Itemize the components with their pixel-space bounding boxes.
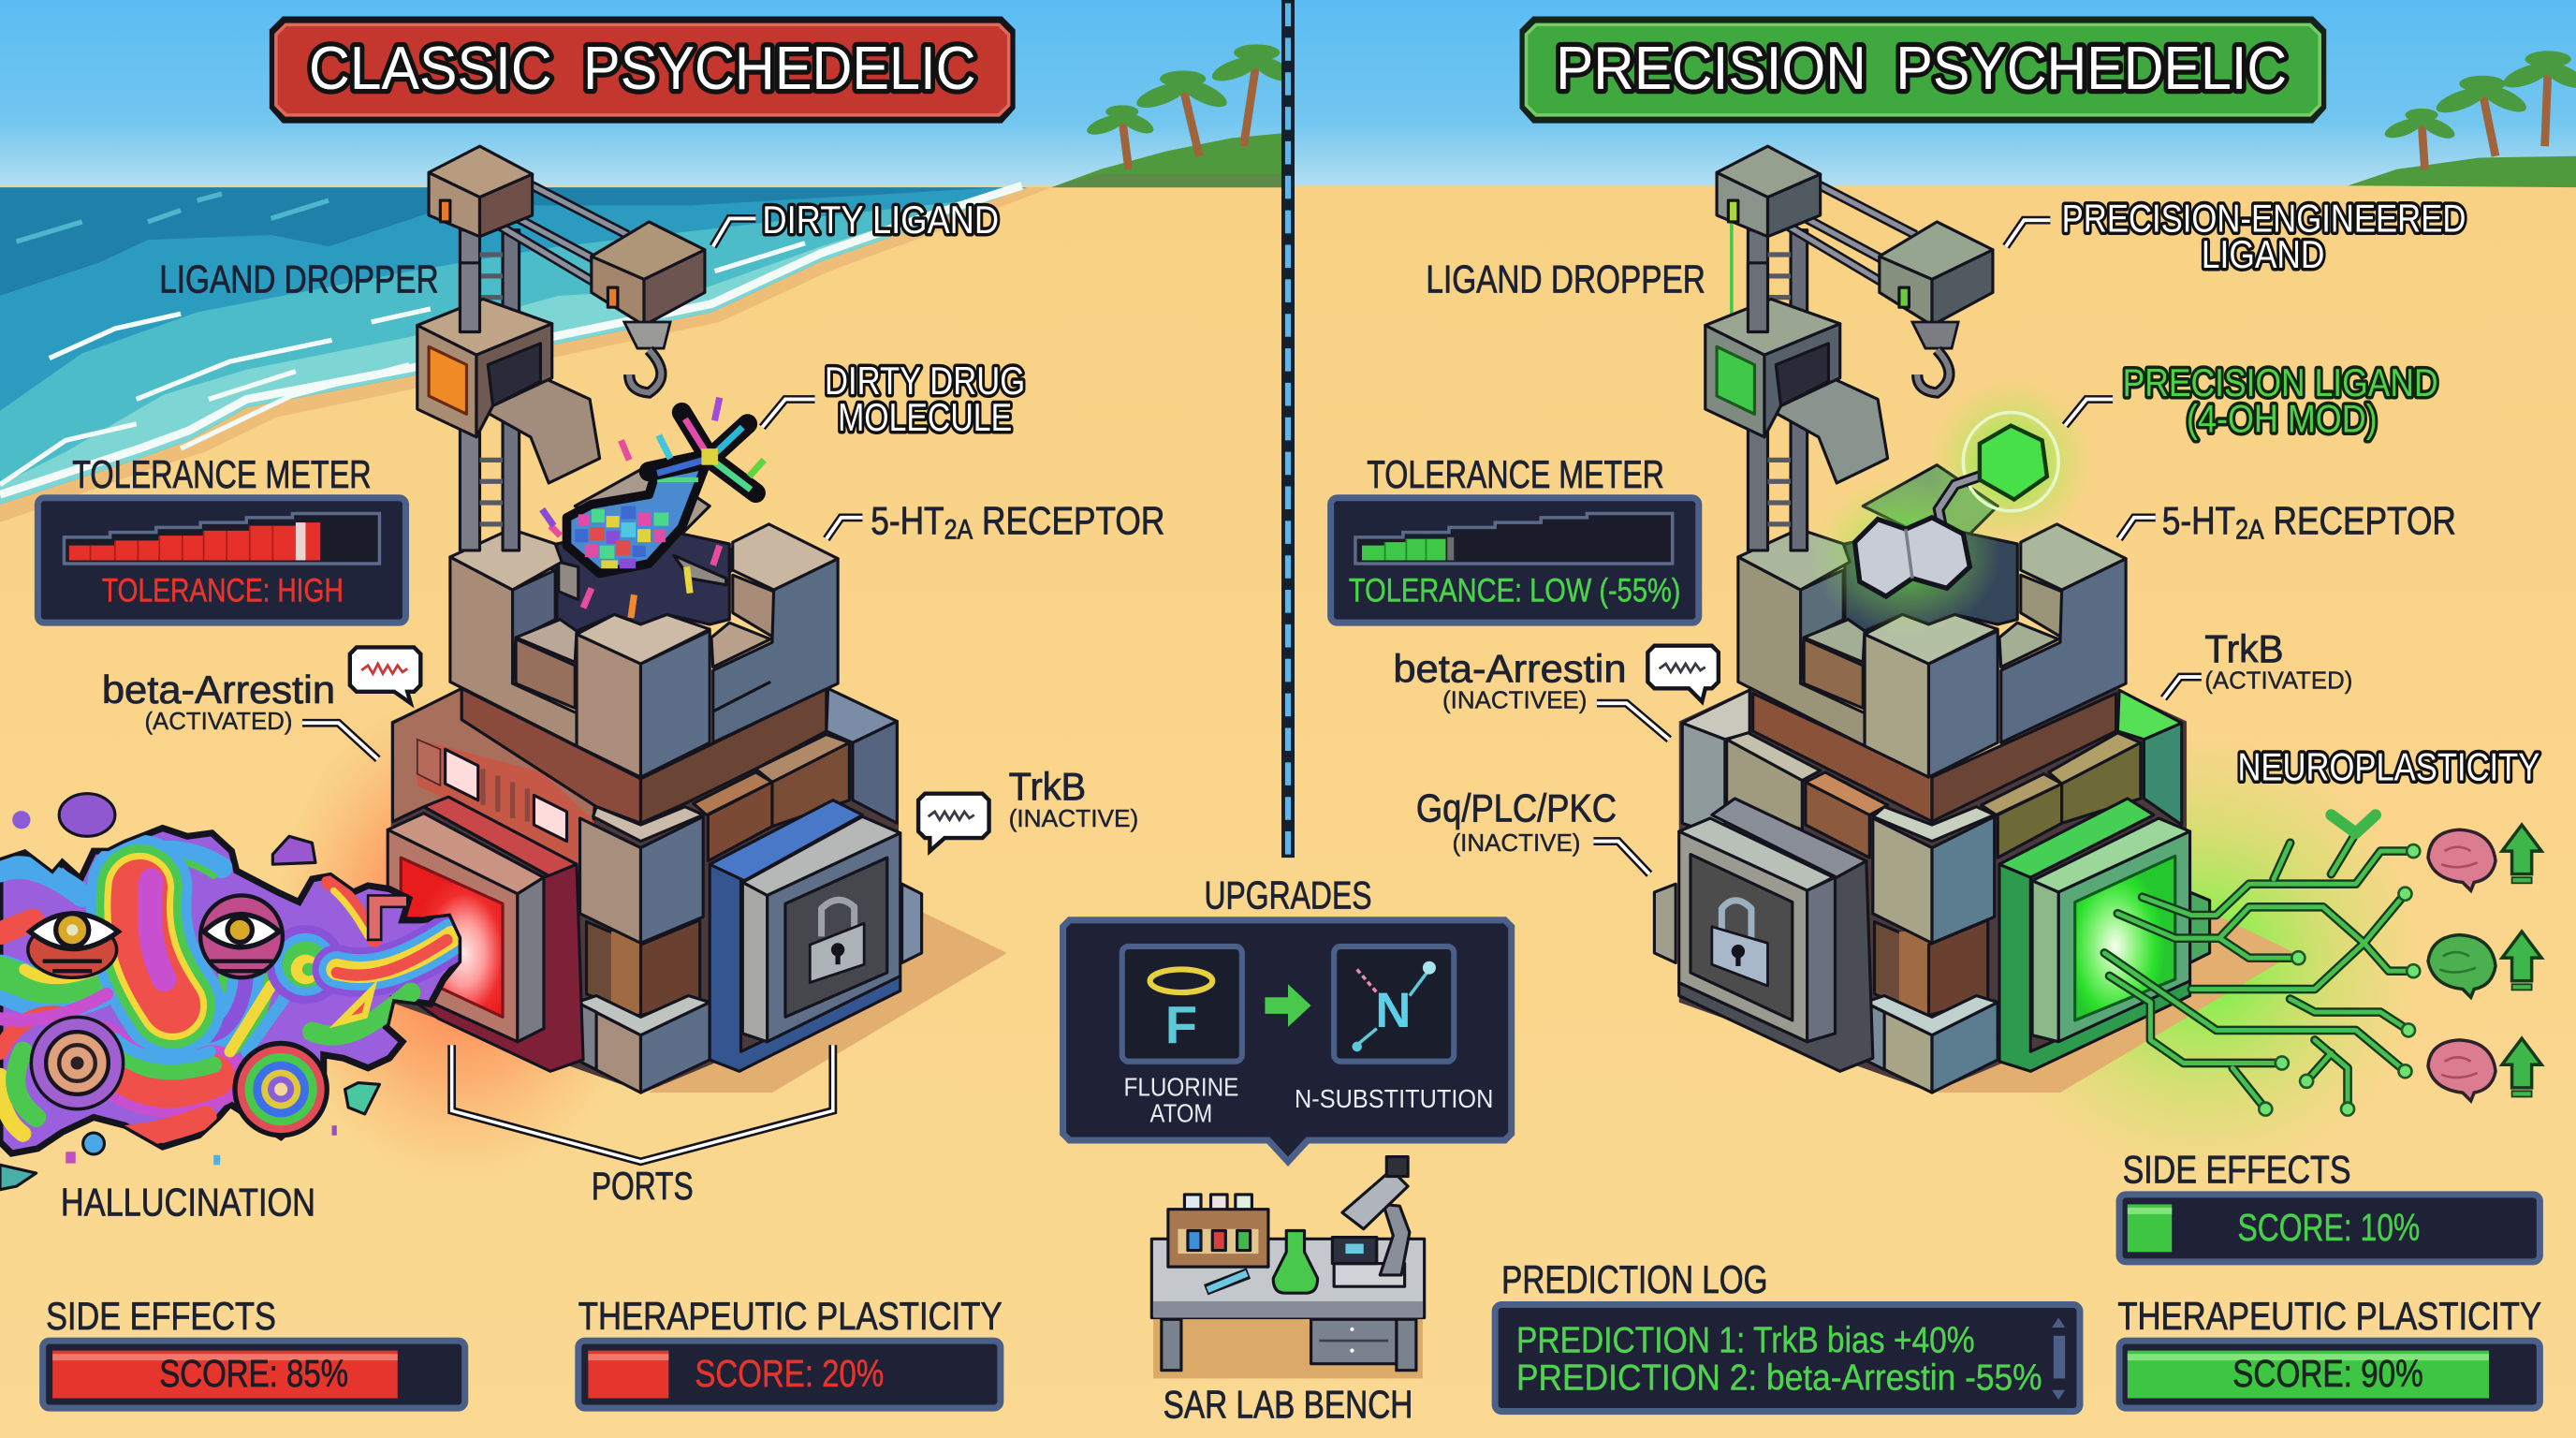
label: dirty drug molecule with leader: DIRTY DRUG — [825, 359, 1025, 403]
crane top block — [429, 146, 533, 237]
floating droplets — [0, 794, 379, 1190]
brown band — [461, 688, 827, 823]
label: trkB inactive: TrkB — [1009, 765, 1086, 809]
ground shadow — [649, 907, 1007, 1093]
label: trkB activated — [2163, 626, 2352, 698]
icon: spiral right — [235, 1043, 327, 1136]
port: green active — [1999, 799, 2210, 1071]
title banner: classic: CLASSIC — [309, 34, 552, 102]
brown band — [1753, 694, 2116, 822]
panel: therapeutic plasticity classic: THERAPEUTIC PLASTICITY — [578, 1294, 1003, 1338]
pipette — [1206, 1273, 1249, 1290]
right corner pillar — [827, 688, 897, 823]
tan and brown side blocks — [694, 734, 849, 861]
panel: prediction log: PREDICTION 2: beta-Arrestin -55% — [1516, 1358, 2042, 1399]
green glow around the activated port — [1980, 740, 2423, 1183]
ocean with foam and wet sand — [0, 185, 1051, 522]
label: hallucination: HALLUCINATION — [61, 1181, 315, 1225]
test tube rack — [1168, 1195, 1268, 1267]
panel: tolerance meter low: TOLERANCE: LOW (-55%) — [1349, 572, 1680, 609]
arrow: upgrade — [1265, 984, 1311, 1027]
mast and ladder — [1732, 213, 1808, 550]
icon: brain pink bottom — [2428, 1040, 2496, 1101]
ground shadow — [1937, 907, 2295, 1093]
panel: therapeutic plasticity classic — [578, 1294, 1003, 1408]
label: Gq/PLC/PKC inactive: Gq/PLC/PKC — [1416, 786, 1617, 830]
panel: side effects precision — [2119, 1148, 2539, 1262]
panel: side effects classic — [43, 1294, 465, 1408]
right corner pillar green — [2117, 690, 2182, 825]
title banner: classic: PSYCHEDELIC — [583, 34, 976, 102]
speech bubble: beta-arrestin signal — [350, 647, 420, 703]
label: 5-HT2A receptor (precision) — [2119, 498, 2456, 546]
label: trkB inactive — [1009, 765, 1138, 832]
right island with palm trees — [2348, 51, 2576, 187]
label: ligand dropper (classic): LIGAND DROPPER — [159, 257, 439, 301]
panel: tolerance meter high: TOLERANCE: HIGH — [102, 572, 344, 609]
label: 5-HT2A receptor (classic): 2A — [944, 515, 973, 546]
label: ports with bracket — [452, 1045, 833, 1208]
label: precision engineered ligand with leader: LIGAND — [2202, 232, 2324, 276]
body base — [1679, 688, 2187, 1093]
label: beta-arrestin inactive: (INACTIVEE) — [1442, 685, 1587, 713]
panel: side effects precision: SCORE: 10% — [2237, 1206, 2420, 1249]
title banner: precision: PSYCHEDELIC — [1895, 34, 2287, 102]
label: trkB inactive: (INACTIVE) — [1009, 804, 1138, 832]
crown of the receptor — [450, 465, 838, 777]
hopper box with chute — [1705, 263, 1888, 483]
icon: padlock — [810, 900, 864, 983]
panel: therapeutic plasticity classic: SCORE: 20% — [695, 1352, 884, 1395]
label: 5-HT2A receptor (precision): 5-HT — [2162, 498, 2249, 542]
label: 5-HT2A receptor (precision): 2A — [2235, 515, 2264, 546]
panel: prediction log: PREDICTION LOG — [1501, 1257, 1767, 1301]
label: fluorine atom: FLUORINE — [1123, 1073, 1238, 1102]
label: ligand dropper (precision): LIGAND DROPPER — [1426, 257, 1705, 301]
flask — [1273, 1231, 1318, 1293]
panel: side effects precision: SIDE EFFECTS — [2123, 1148, 2351, 1192]
crane: classic ligand dropper — [417, 146, 705, 550]
port: red active — [388, 797, 583, 1071]
icon: hook — [1912, 322, 1958, 392]
port: grey with lock — [1654, 799, 1873, 1071]
label: precision engineered ligand with leader — [2006, 196, 2466, 276]
icon: fluorine atom: F — [1165, 995, 1197, 1054]
center column brown — [1875, 920, 1988, 1016]
icon: n-substitution: N — [1375, 983, 1411, 1038]
label: beta-arrestin activated — [102, 668, 378, 759]
microscope — [1332, 1157, 1410, 1286]
label: n-substitution: N-SUBSTITUTION — [1295, 1084, 1493, 1113]
label: 5-HT2A receptor (classic): 5-HT — [871, 498, 959, 542]
speech bubble: trkB signal — [918, 794, 989, 851]
icon: eye right — [200, 895, 283, 977]
upper center pillar — [580, 807, 703, 943]
label: 5-HT2A receptor (classic): RECEPTOR — [973, 498, 1164, 542]
neuroplasticity circuit branches — [2104, 814, 2420, 1116]
label: trkB activated: TrkB — [2204, 626, 2284, 670]
label: precision engineered ligand with leader: PRECISION-ENGINEERED — [2062, 196, 2466, 240]
crown of the receptor — [1738, 465, 2126, 777]
label: beta-arrestin activated: (ACTIVATED) — [144, 707, 292, 735]
title banner: classic — [270, 17, 1016, 124]
tan and orange blocks — [1727, 733, 1888, 858]
speech bubble: inactive signal — [1647, 646, 1719, 701]
title banner: precision — [1519, 17, 2326, 124]
panel: side effects classic: SIDE EFFECTS — [46, 1294, 276, 1338]
left corner pillar — [1682, 690, 1749, 838]
label: Gq/PLC/PKC inactive — [1416, 786, 1649, 874]
activated beta-arrestin upper panel with lights — [392, 688, 594, 888]
tower: precision receptor — [1654, 465, 2295, 1093]
background: sky — [0, 0, 2576, 187]
panel: tolerance meter low — [1331, 452, 1699, 623]
bench top — [1151, 1239, 1425, 1318]
dirty drug molecule — [542, 398, 764, 618]
port: blue with lock — [710, 800, 922, 1071]
center chain divider — [1284, 0, 1292, 858]
label: beta-arrestin inactive: beta-Arrestin — [1393, 646, 1627, 690]
label: fluorine atom: ATOM — [1150, 1099, 1212, 1128]
panel: upgrades: UPGRADES — [1204, 873, 1372, 917]
label: Gq/PLC/PKC inactive: (INACTIVE) — [1453, 829, 1580, 857]
icon: n-substitution — [1334, 946, 1454, 1062]
icon: up arrow bottom — [2502, 1038, 2541, 1096]
beam fragment at port — [368, 895, 407, 940]
lower center pillar — [577, 996, 710, 1093]
lower center pillar — [1865, 996, 1998, 1093]
label: precision ligand 4-OH mod with leader: (4-OH MOD) — [2187, 397, 2378, 441]
icon: brain green middle — [2428, 935, 2496, 997]
panel: prediction log: PREDICTION 1: TrkB bias +40% — [1516, 1320, 1975, 1360]
mast and ladder — [460, 230, 520, 550]
icon: up arrow top — [2502, 825, 2541, 883]
precision ligand molecule — [1810, 379, 2093, 634]
label: SAR lab bench: SAR LAB BENCH — [1164, 1383, 1412, 1427]
label: dirty drug molecule with leader — [762, 359, 1025, 439]
panel: prediction log — [1495, 1257, 2080, 1412]
title banner: precision: PRECISION — [1556, 34, 1866, 102]
icon: hook — [624, 322, 670, 392]
olive side blocks — [1982, 733, 2141, 858]
SAR lab bench — [1151, 1157, 1425, 1427]
label: precision ligand 4-OH mod with leader — [2065, 360, 2438, 441]
left island with palm trees — [1051, 44, 1296, 187]
label: beta-arrestin inactive — [1393, 646, 1669, 740]
hopper box with chute — [417, 263, 600, 483]
crane arm block — [592, 222, 705, 325]
crane: precision ligand dropper — [1705, 146, 1993, 550]
label: 5-HT2A receptor (precision): RECEPTOR — [2264, 498, 2456, 542]
panel: upgrades — [1063, 873, 1512, 1162]
bench legs and drawers — [1162, 1319, 1416, 1371]
label: dirty ligand with leader: DIRTY LIGAND — [762, 198, 999, 242]
panel: tolerance meter low: TOLERANCE METER — [1367, 452, 1664, 496]
icon: padlock — [1712, 901, 1767, 986]
hallucination cloud — [0, 794, 459, 1190]
panel: tolerance meter high: TOLERANCE METER — [72, 452, 372, 496]
icon: up arrow middle — [2502, 932, 2541, 990]
panel: tolerance meter high — [37, 452, 406, 623]
center column brown — [587, 920, 700, 1016]
icon: eye left — [28, 914, 118, 977]
label: 5-HT2A receptor (classic) — [827, 498, 1164, 546]
red glow around the activated port — [271, 690, 649, 1183]
upper center pillar — [1873, 807, 1995, 943]
label: trkB activated: (ACTIVATED) — [2204, 666, 2352, 694]
label: ports with bracket: PORTS — [592, 1164, 694, 1208]
icon: spiral left — [31, 1017, 124, 1109]
label: dirty ligand with leader — [713, 198, 999, 246]
crane arm truss — [485, 184, 627, 283]
label: precision ligand 4-OH mod with leader: PRECISION LIGAND — [2123, 360, 2438, 404]
panel: side effects classic: SCORE: 85% — [159, 1352, 348, 1395]
crane arm block — [1880, 222, 1993, 325]
crane arm truss — [1773, 184, 1915, 283]
body base — [391, 688, 899, 1093]
icon: fluorine atom — [1122, 946, 1242, 1062]
floating specks — [12, 811, 337, 1165]
label: beta-arrestin activated: beta-Arrestin — [102, 668, 335, 712]
crane top block — [1717, 146, 1821, 237]
panel: therapeutic plasticity precision — [2117, 1294, 2541, 1408]
label: dirty drug molecule with leader: MOLECULE — [838, 395, 1012, 439]
icon: brain pink top — [2428, 829, 2496, 890]
tower: classic receptor — [388, 465, 1007, 1093]
panel: therapeutic plasticity precision: SCORE: 90% — [2232, 1352, 2423, 1395]
label: fluorine atom — [1123, 1073, 1238, 1128]
